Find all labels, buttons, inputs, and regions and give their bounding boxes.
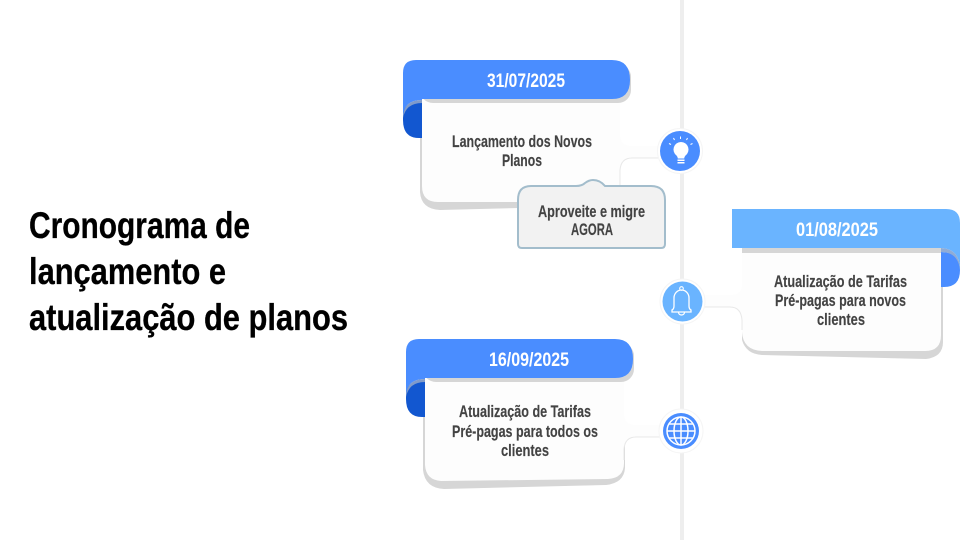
title: Cronograma de <box>29 205 250 246</box>
date banner <box>732 209 960 270</box>
card shadow <box>423 410 625 489</box>
card text: Atualização de Tarifas <box>774 272 907 291</box>
card text: clientes <box>501 441 549 460</box>
card text: Planos <box>502 151 542 170</box>
card body with connector <box>702 249 941 351</box>
card text: Lançamento dos Novos <box>452 132 592 151</box>
folded ribbon end <box>403 103 422 138</box>
panel: milestone 31/07/2025 <box>403 60 662 210</box>
date banner <box>406 339 634 397</box>
card text: Pré-pagas para novos <box>775 291 906 310</box>
icon: bell <box>660 279 705 324</box>
connector outline <box>624 437 666 460</box>
folded ribbon end <box>406 382 425 417</box>
callout: Aproveite e migre AGORA <box>518 180 665 248</box>
card shadow <box>420 130 560 210</box>
icon: light bulb <box>658 128 702 174</box>
banner under-shadow <box>742 248 941 253</box>
card text: Pré-pagas para todos os <box>452 422 598 441</box>
card text <box>774 272 907 329</box>
panel: milestone 01/08/2025 <box>702 209 960 359</box>
date banner: 16/09/2025 <box>489 350 569 371</box>
panel: milestone 16/09/2025 <box>406 339 666 489</box>
card shadow <box>742 253 943 359</box>
connector outline <box>620 158 662 186</box>
connector outline <box>702 307 742 330</box>
icon: globe <box>659 409 703 453</box>
title: lançamento e <box>29 251 226 292</box>
card text <box>452 132 592 170</box>
card text: clientes <box>817 310 865 329</box>
timeline axis <box>680 0 684 540</box>
date banner: 01/08/2025 <box>796 220 878 241</box>
title: atualização de planos <box>29 297 348 338</box>
card text: Atualização de Tarifas <box>459 402 591 421</box>
card text <box>452 402 598 460</box>
date banner: 31/07/2025 <box>487 71 565 92</box>
callout: Aproveite e migre AGORA: AGORA <box>571 220 613 239</box>
card body with connector <box>422 100 662 202</box>
title <box>29 205 348 338</box>
folded ribbon end <box>941 252 960 287</box>
callout: Aproveite e migre AGORA: Aproveite e migre <box>538 202 645 221</box>
card body with connector <box>425 379 666 481</box>
date banner <box>403 60 631 118</box>
